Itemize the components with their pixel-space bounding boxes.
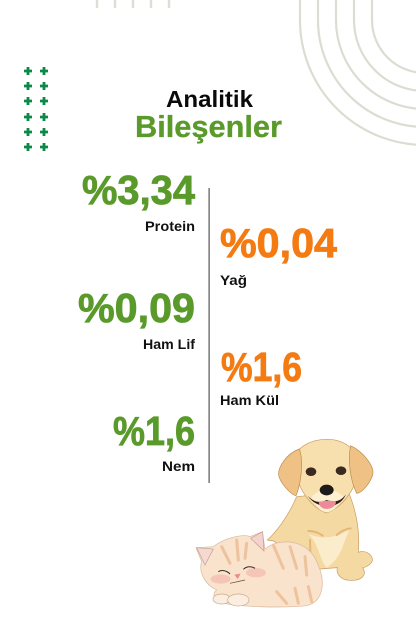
puppy [267, 439, 373, 580]
stat: ham kul: Ham Kül [220, 392, 279, 408]
title: Analitik: Analitik [166, 86, 253, 112]
illustration: puppy and kitten [196, 439, 373, 607]
kitten [196, 532, 322, 607]
icon: green plus grid [24, 67, 48, 151]
center divider [208, 188, 210, 483]
stat: ham lif: %0,09 [78, 285, 195, 331]
stat: nem: Nem [162, 458, 195, 474]
decorative arcs top right [300, 0, 416, 145]
stat: yag [220, 220, 337, 288]
stat: ham kul [220, 344, 302, 408]
stat: protein [82, 167, 195, 234]
stat: protein: %3,34 [82, 167, 195, 213]
decorative ticks top [97, 0, 169, 8]
stat: nem: %1,6 [113, 408, 195, 454]
stat: protein: Protein [145, 218, 195, 234]
stat: ham lif: Ham Lif [143, 336, 195, 352]
title: Bileşenler: Bileşenler [135, 109, 282, 144]
stat: ham kul: %1,6 [221, 344, 302, 390]
stat: nem [113, 408, 195, 474]
stat: yag: %0,04 [220, 220, 337, 266]
stat: ham lif [78, 285, 195, 352]
stat: yag: Yağ [220, 272, 247, 288]
